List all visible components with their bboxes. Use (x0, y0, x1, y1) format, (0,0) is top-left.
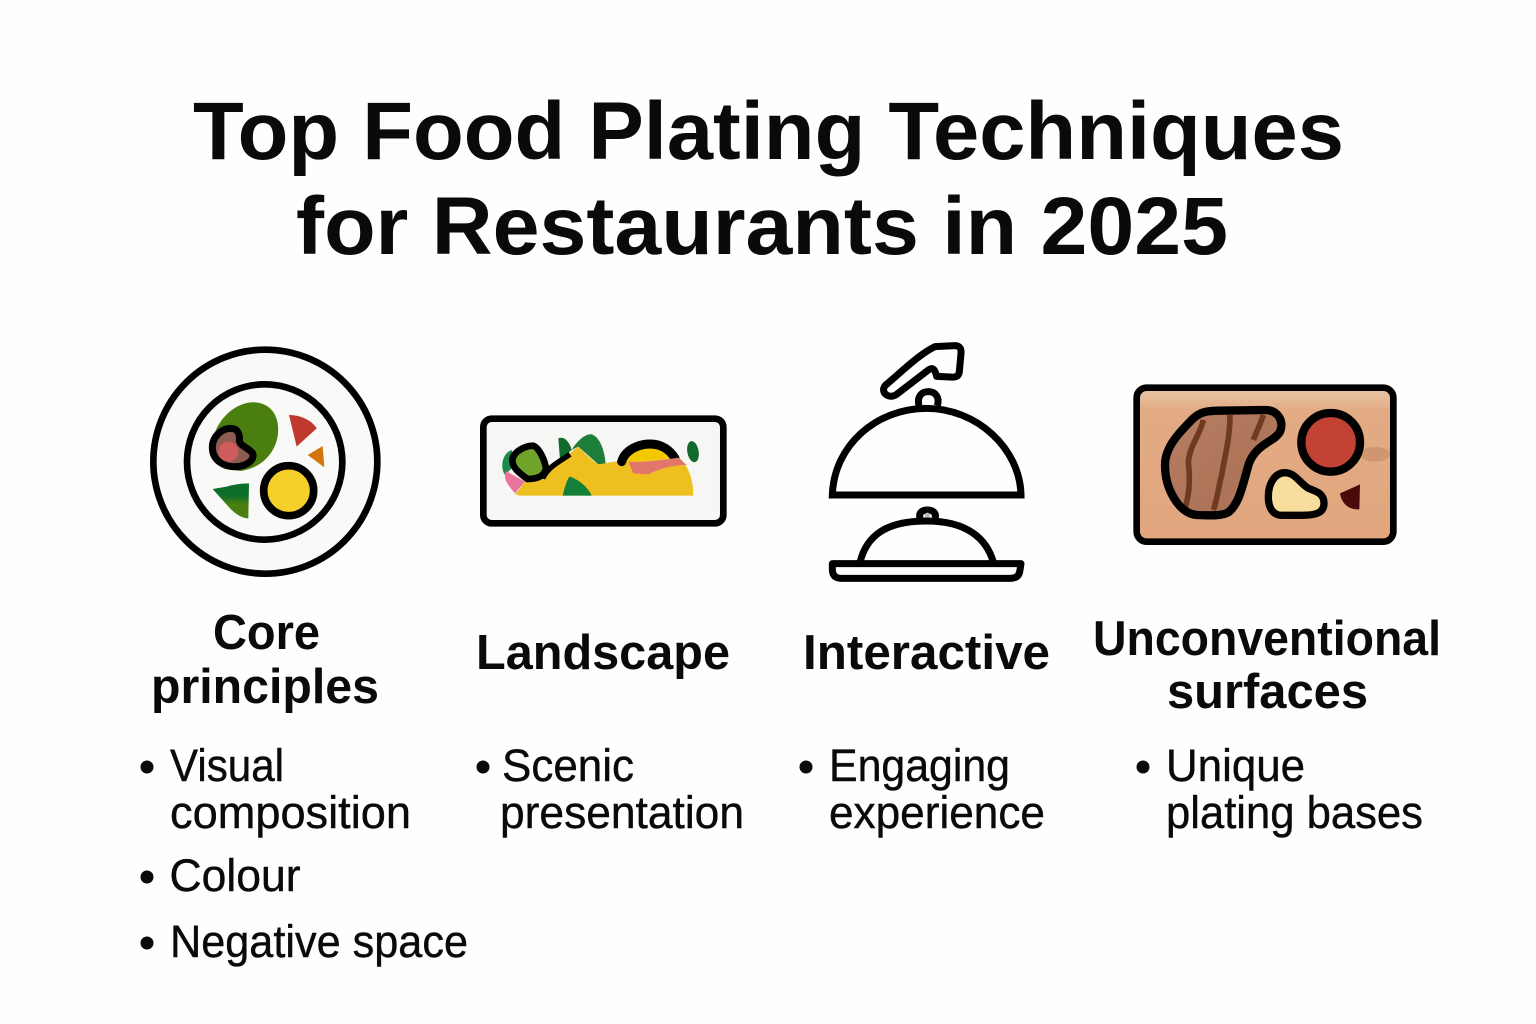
heading: landscape: Landscape (476, 626, 730, 680)
title: for Restaurants in 2025 (296, 181, 1228, 272)
title: Top Food Plating Techniques (193, 86, 1344, 177)
heading: unconventional surfaces: Unconventional (1093, 612, 1441, 666)
bullet list: unconventional surfaces: Unique (1166, 740, 1305, 791)
bullet list: interactive: experience (829, 787, 1045, 838)
bullet list: core principles: Negative space (170, 916, 468, 967)
bullet list: unconventional surfaces: plating bases (1166, 787, 1423, 838)
heading: core principles: Core (213, 606, 320, 660)
bullet list: core principles: Colour (170, 850, 301, 901)
heading: core principles (151, 606, 379, 714)
bullet list: landscape: presentation (500, 787, 744, 838)
icon: cloches with lifting hand (832, 346, 1021, 578)
bullet list: interactive: Engaging (829, 740, 1010, 791)
heading: core principles: principles (151, 660, 379, 714)
panel: landscape (476, 419, 744, 838)
heading: unconventional surfaces: surfaces (1167, 665, 1368, 719)
icon: landscape plate (483, 419, 723, 523)
icon: wooden board with steak (1137, 388, 1393, 542)
bullet list: interactive (800, 740, 1045, 838)
bullet list: landscape: Scenic (502, 740, 634, 791)
bullet list: landscape (476, 740, 744, 838)
bullet list: unconventional surfaces (1136, 740, 1423, 838)
panel: unconventional surfaces (1093, 388, 1441, 838)
title (193, 86, 1344, 272)
bullet list: core principles: composition (170, 787, 411, 838)
panel: interactive (800, 346, 1050, 838)
bullet list: core principles (140, 740, 468, 967)
panel: core principles (140, 350, 468, 967)
heading: interactive: Interactive (803, 626, 1050, 680)
icon: plate with food (153, 350, 377, 574)
heading: unconventional surfaces (1093, 612, 1441, 719)
bullet list: core principles: Visual (170, 740, 284, 791)
